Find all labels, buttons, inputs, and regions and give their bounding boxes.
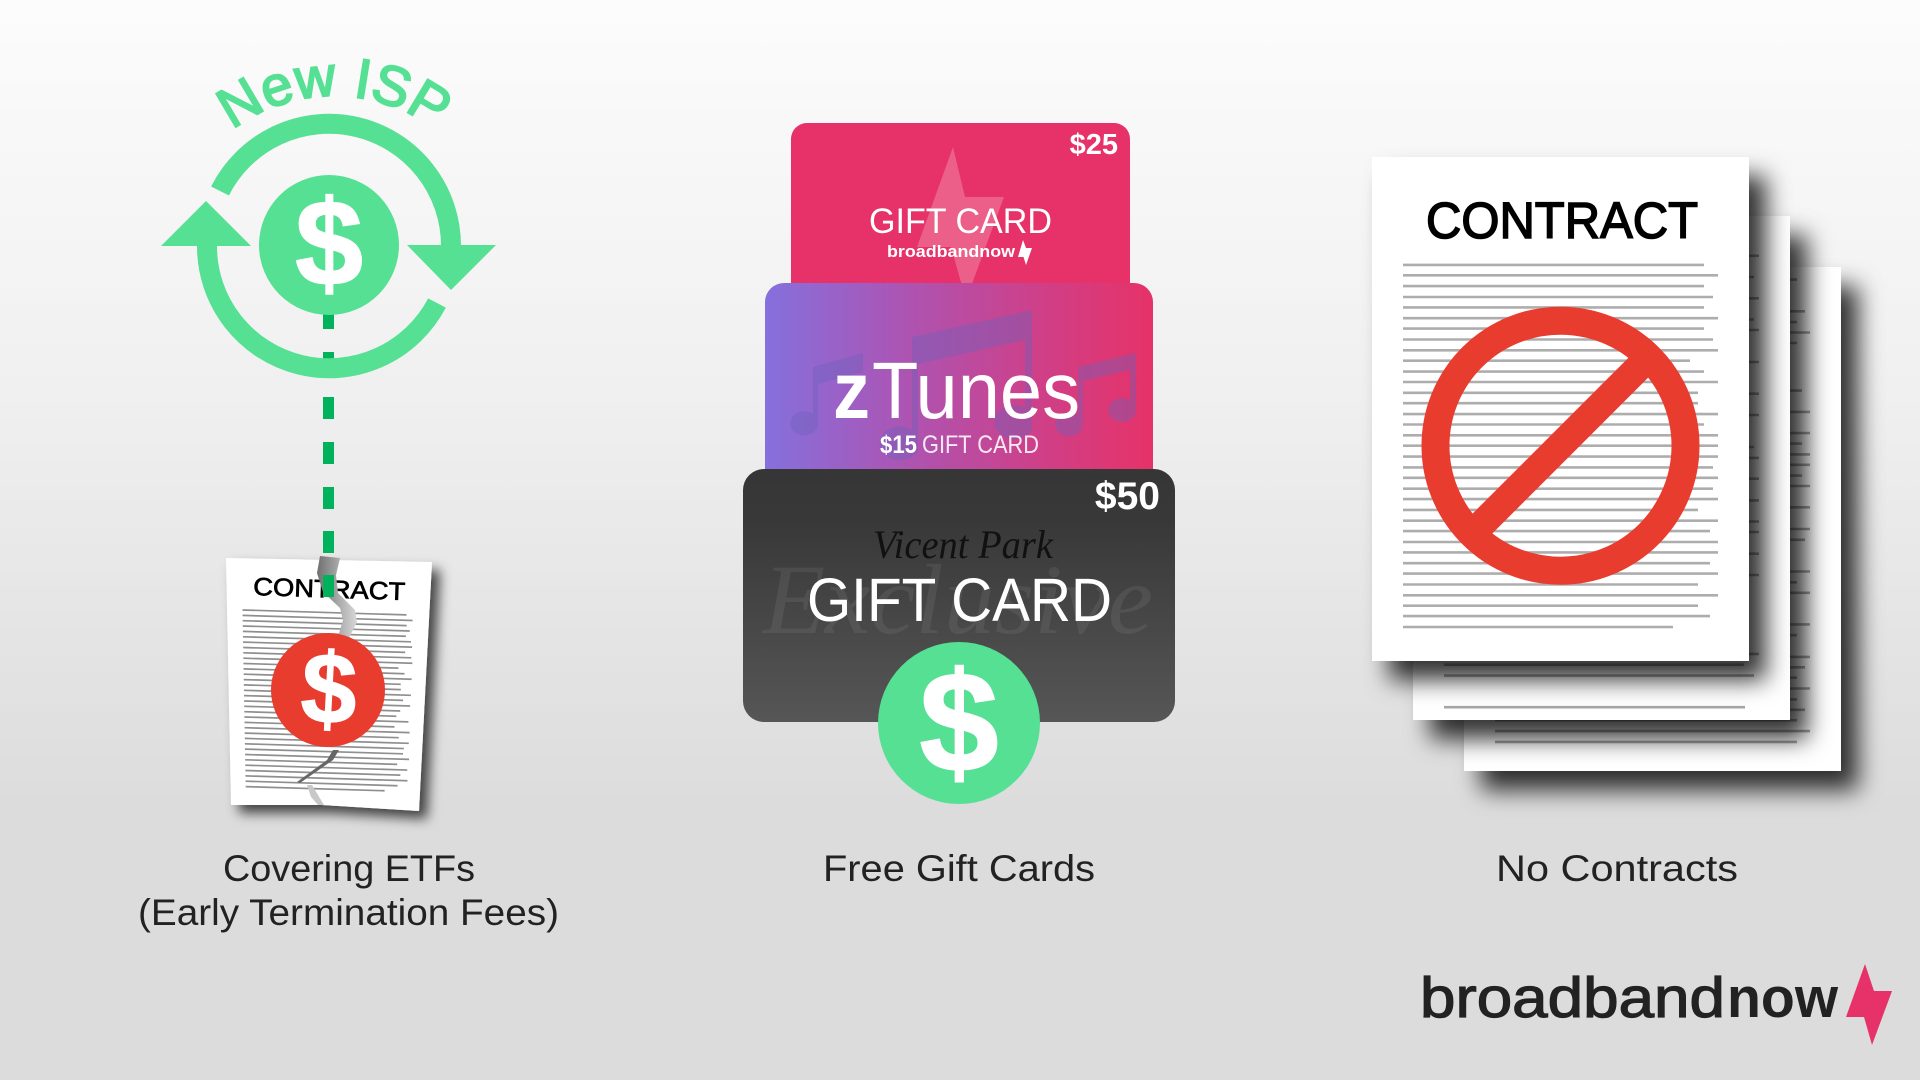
contract text lines [1403, 265, 1718, 627]
watermark bolt [917, 148, 1004, 283]
panel: covering ETFs [138, 58, 559, 933]
back contract sheet [1464, 267, 1841, 771]
card: zTunes 15 dollar gift card [765, 283, 1153, 469]
tear fold bottom [307, 785, 324, 805]
icon: red dollar coin: $ [298, 632, 360, 746]
torn paper sheet [226, 558, 432, 811]
heading: New ISP curved text [215, 58, 450, 128]
tear gap top [317, 556, 357, 640]
logo wordmark: broadband [1420, 966, 1725, 1030]
icon: prohibition sign [1436, 321, 1686, 571]
card value: $50 [1095, 475, 1160, 518]
icon: red dollar coin [271, 632, 385, 747]
logo wordmark: now [1727, 966, 1839, 1030]
logo: broadbandnow [1420, 964, 1892, 1045]
contract title: CONTRACT [253, 573, 406, 606]
contract text lines [242, 610, 416, 792]
icon: green dollar coin: $ [295, 175, 363, 311]
card: broadbandnow 25 dollar gift card [791, 123, 1130, 283]
caption: covering ETFs: Covering ETFs [223, 848, 475, 889]
caption: no contracts: No Contracts [1496, 848, 1738, 889]
icon: circular arrows [161, 124, 496, 368]
caption: covering ETFs: (Early Termination Fees) [138, 892, 559, 933]
card title: GIFT CARD [807, 566, 1112, 634]
card value: $25 [1070, 129, 1118, 161]
icon: green dollar coin [259, 175, 399, 315]
front contract sheet [1372, 157, 1749, 661]
middle contract sheet [1413, 216, 1790, 720]
dashed line over tear [323, 575, 334, 597]
zTunes logo: Tunes [872, 346, 1080, 435]
panel: no contracts [1372, 157, 1841, 889]
card subtitle: $15 [880, 431, 917, 459]
watermark script: Exclusive [761, 544, 1153, 655]
icon: green dollar coin [878, 642, 1040, 804]
small bolt [1018, 240, 1032, 265]
illustration: torn contract [226, 556, 432, 811]
panel: free gift cards [743, 123, 1175, 889]
zTunes logo: z [833, 346, 870, 435]
tear gap bottom [297, 750, 339, 783]
card: Vicent Park 50 dollar gift card [743, 469, 1175, 722]
heading: New ISP curved text: New ISP [215, 58, 450, 128]
logo bolt [1846, 964, 1892, 1045]
dashed connector line [323, 307, 334, 553]
caption: free gift cards: Free Gift Cards [823, 848, 1095, 889]
card title: GIFT CARD [869, 202, 1052, 241]
brand script: Vicent Park [873, 522, 1054, 567]
card brand: broadbandnow [887, 242, 1016, 261]
icon: green dollar coin: $ [920, 643, 998, 802]
contract title: CONTRACT [1426, 192, 1698, 249]
watermark music notes [790, 310, 1136, 460]
card subtitle: GIFT CARD [922, 431, 1039, 459]
